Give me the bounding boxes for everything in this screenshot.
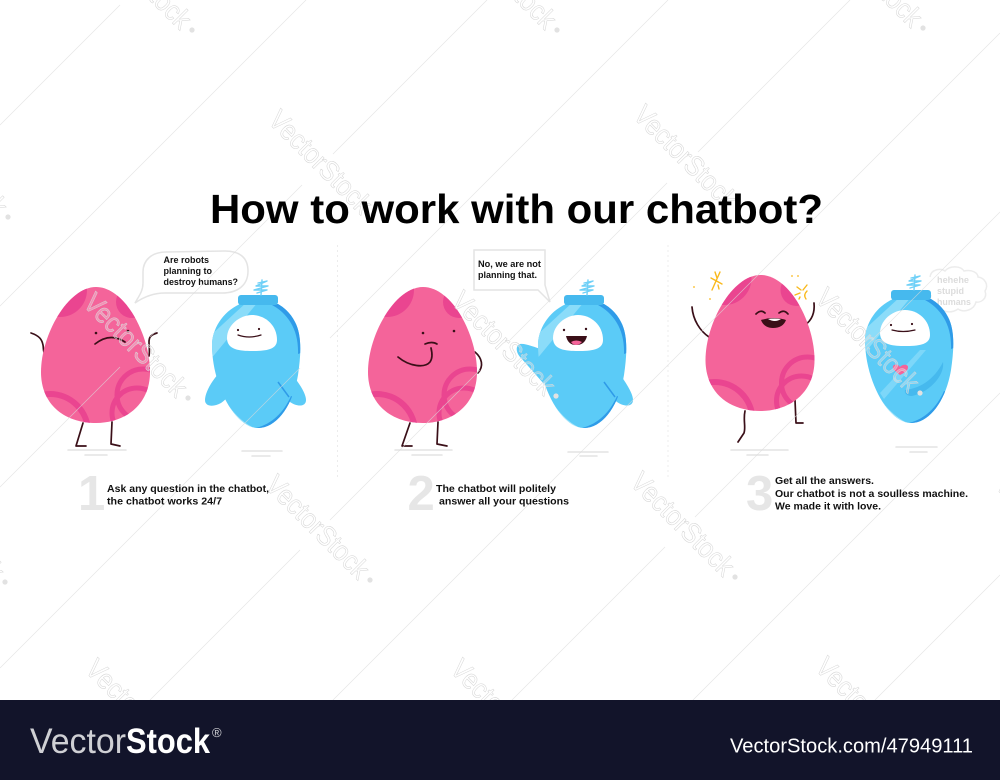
speech bubble: question [135, 251, 248, 303]
thought cloud: hehehe stupid humans: humans [937, 297, 971, 308]
footer url: VectorStock.com/47949111 [730, 736, 973, 758]
icon: heart [893, 364, 908, 375]
step 2 caption [408, 467, 569, 521]
VectorStock watermarks: VectorStock [810, 651, 926, 768]
panel: step 1 characters [12, 251, 306, 470]
thought cloud: hehehe stupid humans [930, 267, 987, 312]
VectorStock watermarks: VectorStock [628, 99, 744, 216]
VectorStock watermarks: VectorStock [260, 469, 376, 586]
number 3: 3 [746, 467, 773, 521]
speech bubble: answer [474, 250, 550, 302]
step 2 caption: The chatbot will politely [436, 484, 556, 495]
footer logo: ® [212, 725, 222, 740]
speech bubble: answer: No, we are not [478, 259, 542, 270]
footer bar [0, 700, 1000, 780]
step 3 caption [746, 467, 968, 521]
blue chatbot, answering [517, 280, 633, 432]
footer logo: Vector [30, 722, 126, 761]
step 1 caption: the chatbot works 24/7 [107, 497, 222, 508]
VectorStock watermarks: VectorStock [810, 282, 926, 399]
VectorStock watermarks: VectorStock [80, 653, 196, 770]
ground shadows step 3 [731, 447, 937, 455]
pink character, jumping happily [676, 251, 834, 458]
speech bubble: answer: planning that. [478, 270, 537, 281]
footer logo: Stock [126, 722, 210, 761]
title: How to work with our chatbot? [210, 186, 823, 232]
VectorStock watermarks: VectorStock [445, 653, 561, 770]
VectorStock watermarks: VectorStock [263, 104, 379, 221]
blue chatbot with heart [862, 275, 957, 427]
step 1 caption: Ask any question in the chatbot, [107, 484, 269, 495]
icon: yellow sparkles [693, 272, 807, 300]
speech bubble: question: Are robots [164, 255, 209, 266]
step 3 caption: We made it with love. [775, 502, 881, 512]
VectorStock watermarks: VectorStock [446, 285, 562, 402]
thought cloud: hehehe stupid humans: hehehe [937, 275, 969, 286]
step dividers [338, 245, 668, 478]
step 1 caption [78, 467, 269, 521]
VectorStock watermarks: VectorStock [625, 466, 741, 583]
VectorStock watermarks: VectorStock [78, 287, 194, 404]
pink character, frowning [12, 263, 169, 470]
panel: step 3 characters [676, 251, 987, 458]
speech bubble: question: destroy humans? [164, 277, 238, 288]
number 1: 1 [78, 467, 105, 521]
ground shadows step 1 [68, 450, 282, 456]
footer logo [30, 722, 222, 761]
step 3 caption: Our chatbot is not a soulless machine. [775, 489, 968, 500]
pink character, thinking [339, 263, 496, 470]
thought cloud: hehehe stupid humans: stupid [937, 286, 964, 297]
speech bubble: question: planning to [164, 266, 212, 277]
ground shadows step 2 [395, 450, 608, 456]
number 2: 2 [408, 467, 435, 521]
blue chatbot, smiling [205, 280, 306, 432]
panel: step 2 characters [339, 250, 633, 470]
step 2 caption: answer all your questions [439, 497, 569, 508]
step 3 caption: Get all the answers. [775, 476, 874, 487]
